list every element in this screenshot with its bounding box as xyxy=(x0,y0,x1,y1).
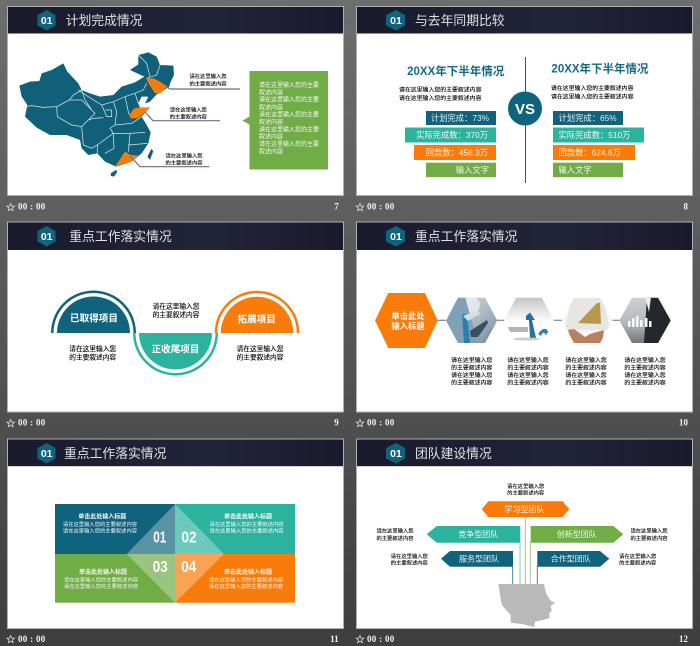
text: top centre: 的主要叙述内容 xyxy=(153,310,200,319)
VS badge xyxy=(508,92,542,126)
header bar: slide 12 xyxy=(357,440,692,466)
footer: slide 7 xyxy=(7,202,339,212)
text: photo 1: 请在这里输入您 xyxy=(451,371,492,379)
panel: slide 7 plan completion map xyxy=(8,6,344,196)
orange hexagon title: 输入标题 xyxy=(391,321,425,331)
footer: slide 9 xyxy=(7,418,339,428)
text: photo 1: 请在这里输入您 xyxy=(451,356,492,364)
quadrant 03: 单击此处输入标题 xyxy=(79,568,127,576)
header bar: slide 7: 01 xyxy=(41,15,53,27)
text: right lower: 请在这里输入您 xyxy=(619,552,656,560)
green speech panel: 叙述内容 xyxy=(259,103,283,111)
text: right upper xyxy=(630,527,668,542)
quadrant 02: 请在这里输入您的主要叙述内容 xyxy=(209,520,284,528)
tag: competitive team xyxy=(427,526,520,543)
text: photo 4: 请在这里输入您 xyxy=(624,356,666,364)
text: left upper: 的主要叙述内容 xyxy=(376,534,414,542)
column: left stats: 请在这里输入您的主要叙述内容 xyxy=(399,86,482,94)
callout text: guangdong: 的主要叙述内容 xyxy=(165,158,203,166)
quadrant 03: 请在这里输入您的主要叙述内容 xyxy=(64,582,139,590)
callout text: northeast xyxy=(189,72,227,88)
footer: slide 10: 10 xyxy=(679,418,688,428)
text: photo 2 xyxy=(507,356,549,387)
header bar: slide 9: 重点工作落实情况 xyxy=(69,229,172,244)
quadrant 02: 02 xyxy=(182,530,197,546)
text: right lower xyxy=(619,552,657,567)
header bar: slide 10 xyxy=(357,222,692,250)
callout leader lines xyxy=(130,87,240,167)
text: photo 4 xyxy=(624,356,666,387)
callout text: guangdong: 请在这里输入您 xyxy=(165,152,203,160)
column: left stats: 实际完成数：370万 xyxy=(416,130,488,140)
text: bottom right xyxy=(237,344,284,362)
callout text: northeast: 的主要叙述内容 xyxy=(189,80,227,88)
header bar: slide 10: 重点工作落实情况 xyxy=(415,229,518,244)
header bar: slide 11: 01 xyxy=(41,448,53,460)
semicircle: closing projects xyxy=(133,333,218,375)
icon: grey head silhouette xyxy=(498,584,555,627)
text: photo 3: 请在这里输入您 xyxy=(565,371,607,379)
text: left upper xyxy=(376,527,414,542)
footer: slide 8: 00 : 00 xyxy=(367,202,395,212)
semicircle: completed projects: 已取得项目 xyxy=(70,312,118,324)
panel: slide 9 key work semicircles xyxy=(8,222,344,412)
footer: slide 12: 12 xyxy=(679,634,688,644)
text: bottom left xyxy=(69,344,116,362)
tag: learning team: 学习型团队 xyxy=(504,504,544,514)
header bar: slide 8 xyxy=(357,7,692,34)
footer: slide 10: 00 : 00 xyxy=(367,418,395,428)
orange hexagon title: 单击此处 xyxy=(391,311,425,321)
green speech panel: 叙述内容 xyxy=(259,148,283,156)
text: photo 2: 的主要叙述内容 xyxy=(507,364,549,372)
divider line xyxy=(524,57,526,183)
green speech panel: 叙述内容 xyxy=(259,118,283,126)
column: right stats: 输入文字 xyxy=(558,165,592,175)
green speech panel: 请在这里输入您的主要 xyxy=(259,81,319,89)
column: right stats: 实际完成数：510万 xyxy=(558,130,630,140)
green speech panel: 请在这里输入您的主要 xyxy=(259,111,319,119)
column: left stats: 输入文字 xyxy=(456,165,489,175)
green speech panel: 请在这里输入您的主要 xyxy=(259,96,319,104)
column: right stats: 计划完成：65% xyxy=(558,113,617,123)
footer: slide 10 xyxy=(356,418,688,428)
connector lines to head xyxy=(513,517,537,585)
connector line xyxy=(437,319,670,321)
China map with highlighted provinces xyxy=(19,52,174,177)
text: photo 4: 的主要叙述内容 xyxy=(624,379,666,387)
photo hexagon: businessman with hologram xyxy=(446,297,498,344)
header bar: slide 10: 01 xyxy=(390,231,402,243)
text: photo 1 xyxy=(451,356,492,387)
tag: competitive team: 竞争型团队 xyxy=(458,529,498,539)
quadrant 02 xyxy=(175,504,295,554)
header bar: slide 11 xyxy=(8,440,343,466)
text: photo 4: 的主要叙述内容 xyxy=(624,364,666,372)
text: photo 3: 的主要叙述内容 xyxy=(565,379,607,387)
column: right stats: 请在这里输入您的主要叙述内容 xyxy=(551,84,634,92)
text: left lower: 的主要叙述内容 xyxy=(391,559,429,567)
column: left stats: 计划完成：73% xyxy=(431,113,490,123)
column: left stats: 请在这里输入您的主要叙述内容 xyxy=(399,94,482,102)
panel: slide 12 team building xyxy=(356,439,692,628)
footer: slide 9: 9 xyxy=(334,418,339,428)
orange hexagon title xyxy=(375,293,438,348)
text: photo 1: 的主要叙述内容 xyxy=(451,364,492,372)
green speech panel: 请在这里输入您的主要 xyxy=(259,140,319,148)
footer: slide 7: 7 xyxy=(334,202,339,212)
quadrant 03: 03 xyxy=(153,559,168,576)
quadrant 03: 请在这里输入您的主要叙述内容 xyxy=(64,576,139,584)
text: top centre xyxy=(153,302,200,319)
panel: slide 11 four quadrant block xyxy=(8,439,344,628)
header bar: slide 9: 01 xyxy=(41,231,53,243)
footer: slide 11 xyxy=(7,634,339,644)
quadrant 04: 请在这里输入您的主要叙述内容 xyxy=(209,582,284,590)
photo hexagon: hands holding gold bars xyxy=(561,297,613,344)
callout text: northeast: 请在这里输入您 xyxy=(189,72,227,80)
photo hexagon: blue arrow xyxy=(504,297,554,344)
column: right stats xyxy=(551,62,649,177)
quadrant 04: 04 xyxy=(181,559,196,576)
column: right stats: 回款数：624.6万 xyxy=(558,148,621,158)
text: photo 3 xyxy=(565,356,607,387)
text: photo 2: 请在这里输入您 xyxy=(507,356,549,364)
quadrant 01: 01 xyxy=(153,530,166,546)
text: photo 3: 请在这里输入您 xyxy=(565,356,607,364)
text: photo 2: 请在这里输入您 xyxy=(507,371,549,379)
text: right upper: 请在这里输入您 xyxy=(630,527,668,535)
text: right upper: 的主要叙述内容 xyxy=(630,534,668,542)
semicircle: completed projects xyxy=(51,290,136,333)
column: right stats: 请在这里输入您的主要叙述内容 xyxy=(551,92,634,100)
text: photo 4: 请在这里输入您 xyxy=(624,371,666,379)
text: photo 3: 的主要叙述内容 xyxy=(565,364,607,372)
semicircle: expansion projects: 拓展项目 xyxy=(238,314,276,326)
tag: cooperative team: 合作型团队 xyxy=(551,554,591,564)
quadrant 04: 请在这里输入您的主要叙述内容 xyxy=(209,576,284,584)
text: top xyxy=(507,482,545,497)
footer: slide 7: 00 : 00 xyxy=(18,202,46,212)
column: left stats xyxy=(399,64,505,177)
column: left stats: 20XX年下半年情况 xyxy=(407,64,505,78)
text: left lower: 请在这里输入您 xyxy=(391,552,428,560)
text: right lower: 的主要叙述内容 xyxy=(619,559,657,567)
footer: slide 8: 8 xyxy=(684,202,688,212)
quadrant 01: 请在这里输入您的主要叙述内容 xyxy=(63,526,138,534)
footer: slide 9: 00 : 00 xyxy=(18,418,46,428)
quadrant 01 xyxy=(55,504,175,554)
text: bottom left: 请在这里输入您 xyxy=(69,344,116,353)
green speech panel xyxy=(242,71,328,170)
text: top: 的主要叙述内容 xyxy=(507,489,545,497)
callout text: shandong: 请在这里输入您 xyxy=(170,106,207,114)
callout text: guangdong xyxy=(165,152,203,166)
green speech panel: 叙述内容 xyxy=(259,133,283,141)
callout text: shandong xyxy=(170,106,208,120)
tag: innovative team xyxy=(531,526,623,543)
quadrant 01: 请在这里输入您的主要叙述内容 xyxy=(63,520,138,528)
footer: slide 12: 00 : 00 xyxy=(367,634,395,644)
text: bottom left: 的主要叙述内容 xyxy=(69,352,116,362)
green speech panel: 叙述内容 xyxy=(259,88,283,96)
quadrant 02: 请在这里输入您的主要叙述内容 xyxy=(209,526,284,534)
header bar: slide 7 xyxy=(8,7,343,34)
quadrant 03 xyxy=(55,554,175,603)
header bar: slide 12: 团队建设情况 xyxy=(415,446,492,461)
quadrant 02: 单击此处输入标题 xyxy=(224,512,272,520)
quadrant 04 xyxy=(175,554,295,603)
footer: slide 12 xyxy=(356,634,688,644)
panel: slide 8 year on year comparison xyxy=(356,6,692,196)
green speech panel: 请在这里输入您的主要 xyxy=(259,125,319,133)
semicircle: expansion projects xyxy=(215,291,299,333)
tag: innovative team: 创新型团队 xyxy=(557,529,597,539)
header bar: slide 11: 重点工作落实情况 xyxy=(64,446,167,461)
header bar: slide 7: 计划完成情况 xyxy=(66,13,143,28)
header bar: slide 9 xyxy=(8,222,343,250)
header bar: slide 8: 与去年同期比较 xyxy=(415,13,505,28)
callout text: shandong: 的主要叙述内容 xyxy=(170,112,208,120)
text: top centre: 请在这里输入您 xyxy=(153,302,200,310)
text: bottom right: 请在这里输入您 xyxy=(237,344,284,353)
tag: service team: 服务型团队 xyxy=(459,554,499,564)
semicircle: closing projects: 正收尾项目 xyxy=(152,344,199,356)
text: photo 1: 的主要叙述内容 xyxy=(451,379,492,387)
header bar: slide 12: 01 xyxy=(390,448,402,460)
quadrant 04: 单击此处输入标题 xyxy=(224,568,272,576)
footer: slide 8 xyxy=(356,202,688,212)
text: left upper: 请在这里输入您 xyxy=(376,527,414,535)
text: photo 2: 的主要叙述内容 xyxy=(507,379,549,387)
text: top: 请在这里输入您 xyxy=(507,482,544,490)
photo hexagon: city and suit xyxy=(619,297,671,344)
column: left stats: 回款数：458.3万 xyxy=(426,148,488,158)
tag: service team xyxy=(441,551,513,567)
text: left lower xyxy=(391,552,429,567)
footer: slide 11: 11 xyxy=(330,634,339,644)
text: bottom right: 的主要叙述内容 xyxy=(237,352,284,362)
header bar: slide 8: 01 xyxy=(390,15,402,27)
footer: slide 11: 00 : 00 xyxy=(18,634,46,644)
panel: slide 10 hexagon photos xyxy=(356,222,692,412)
tag: learning team xyxy=(482,501,569,517)
VS badge: VS xyxy=(515,101,535,118)
column: right stats: 20XX年下半年情况 xyxy=(551,62,649,76)
quadrant 01: 单击此处输入标题 xyxy=(78,512,126,520)
tag: cooperative team xyxy=(537,551,609,567)
